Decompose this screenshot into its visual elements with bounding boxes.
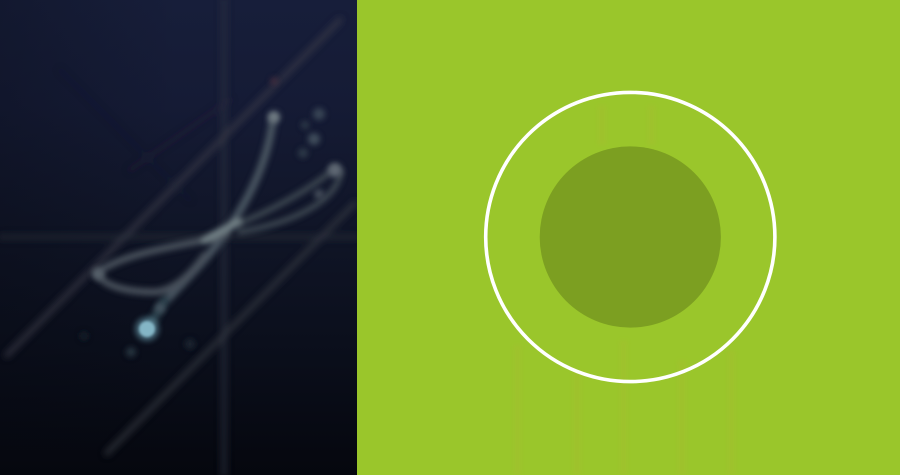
faint guide lines [0,0,357,475]
panel: green background with rings [484,90,777,384]
butterfly orbit curve [98,118,341,322]
red glint [270,77,278,85]
bright planet [135,317,159,341]
inner dark green circle [540,146,721,328]
panel: dark blurred orbital diagram [0,0,357,475]
small orbit nodes [80,108,342,357]
white ring [486,92,775,382]
faint vertical banding [514,105,735,475]
